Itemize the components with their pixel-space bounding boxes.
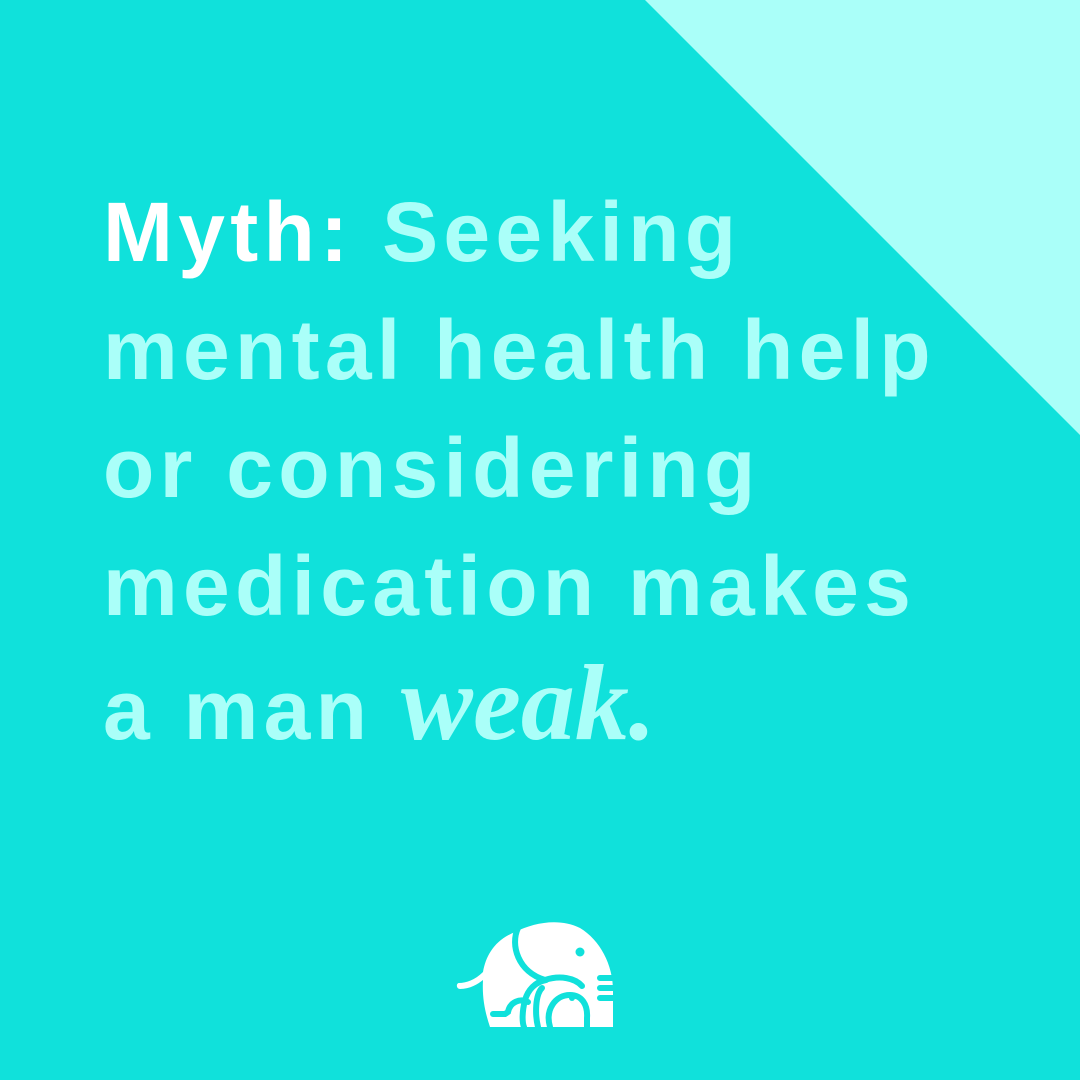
headline text: mental health help <box>103 303 936 397</box>
headline text <box>103 185 936 763</box>
headline text: a man weak. <box>103 644 656 763</box>
icon: elephant logo <box>456 922 613 1027</box>
headline text: or considering <box>103 421 761 515</box>
headline text: medication makes <box>103 539 916 633</box>
headline text: Myth: Seeking <box>103 185 741 279</box>
